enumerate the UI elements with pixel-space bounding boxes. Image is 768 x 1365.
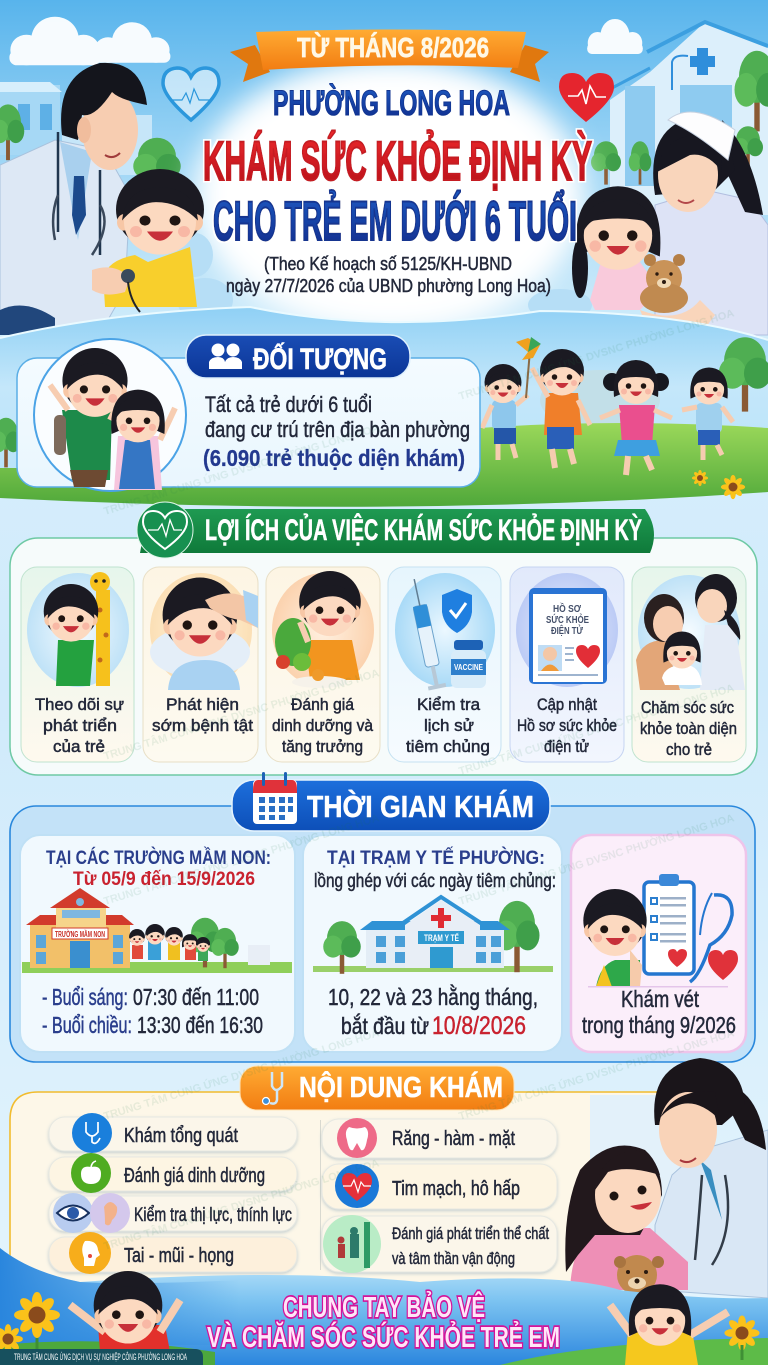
card: health station: TẠI TRẠM Y TẾ PHƯỜNG: <box>327 847 545 869</box>
building left <box>0 82 181 197</box>
target text: Tất cả trẻ dưới 6 tuổi <box>205 392 372 417</box>
card: health station: lồng ghép với các ngày tiêm chủng: <box>314 871 556 892</box>
header panel <box>0 0 768 345</box>
child running 2 <box>532 349 590 468</box>
clouds <box>9 17 643 65</box>
ribbon: TỪ THÁNG 8/2026 <box>297 32 489 63</box>
heading: exam time: THỜI GIAN KHÁM <box>307 788 534 824</box>
icon: calendar <box>253 772 297 824</box>
text panel <box>17 358 480 487</box>
watermarks: TRUNG TÂM CUNG ỨNG DVSNC PHƯỜNG LONG HOA <box>457 811 736 908</box>
target text <box>203 392 470 471</box>
card: complete care: Chăm sóc sức <box>641 698 734 717</box>
slogan <box>207 1290 560 1354</box>
child running 1 <box>482 364 528 460</box>
row: vision and hearing <box>49 1193 297 1233</box>
doctor with girl <box>565 1058 768 1298</box>
row: nutrition <box>49 1153 297 1193</box>
row: development: Đánh giá phát triển thể chất <box>392 1224 549 1243</box>
school illustration <box>22 888 292 973</box>
row: general exam <box>49 1113 297 1153</box>
watermarks: TRUNG TÂM CUNG ỨNG DVSNC PHƯỜNG LONG HOA <box>102 1156 381 1253</box>
child running 3 <box>600 360 672 475</box>
card: health record: điện tử <box>544 737 589 756</box>
watermarks: TRUNG TÂM CUNG ỨNG DVSNC PHƯỜNG LONG HOA <box>457 306 736 403</box>
waving girl <box>610 1284 728 1365</box>
hospital right <box>591 22 768 215</box>
card: kindergartens: TẠI CÁC TRƯỜNG MẦM NON: <box>46 847 271 869</box>
card: growth: phát triển <box>43 716 117 735</box>
footer banner <box>0 1248 768 1365</box>
card: health station: bắt đầu từ <box>341 1013 429 1039</box>
panel: exam content <box>10 1066 710 1295</box>
card: early detection: sớm bệnh tật <box>152 716 253 735</box>
card: vaccination: Kiểm tra <box>417 695 481 714</box>
card: vaccination <box>388 567 501 762</box>
subtitle: (Theo Kế hoạch số 5125/KH-UBND <box>264 254 512 274</box>
watermarks: TRUNG TÂM CUNG ỨNG DVSNC PHƯỜNG LONG HOA <box>457 681 736 778</box>
pinwheel <box>516 337 541 398</box>
heading: exam content: NỘI DUNG KHÁM <box>299 1070 503 1104</box>
icon: people <box>209 344 242 369</box>
clipboard <box>644 874 738 982</box>
waving boy <box>70 1271 180 1352</box>
card: health record <box>510 567 624 762</box>
card: nutrition: dinh dưỡng và <box>272 716 373 735</box>
card: nutrition: Đánh giá <box>291 695 354 714</box>
row: development <box>322 1215 557 1273</box>
organisation label: TRUNG TÂM CUNG ỨNG DỊCH VỤ SỰ NGHIỆP CÔNG PHƯỜNG LONG HOA <box>14 1352 187 1362</box>
heading: exam content <box>240 1066 514 1110</box>
card: nutrition <box>266 567 380 762</box>
card: kindergartens: 13:30 đến 16:30 <box>137 1012 263 1038</box>
card: growth <box>21 567 134 762</box>
watermarks <box>102 306 736 1253</box>
watermarks: TRUNG TÂM CUNG ỨNG DVSNC PHƯỜNG LONG HOA <box>457 1026 736 1123</box>
sunflowers <box>0 1292 760 1360</box>
row: dental <box>322 1118 557 1158</box>
card: health record: HỒ SƠ <box>553 602 581 615</box>
card: complete care <box>632 567 746 762</box>
icon: red heart <box>559 73 614 122</box>
teddy bear <box>614 1255 664 1295</box>
icon: stethoscope <box>262 1072 282 1104</box>
card: complete care: khỏe toàn diện <box>640 719 737 738</box>
row: ENT: Tai - mũi - họng <box>124 1245 234 1267</box>
watermarks: TRUNG TÂM CUNG ỨNG DVSNC PHƯỜNG LONG HOA <box>102 1026 381 1123</box>
row: nutrition: Đánh giá dinh dưỡng <box>124 1165 265 1187</box>
icon: outline heart <box>163 68 219 120</box>
row: dental: Răng - hàm - mặt <box>392 1128 515 1150</box>
child running 4 <box>682 368 733 460</box>
ribbon <box>230 30 549 82</box>
nurse and girl <box>572 112 768 335</box>
slogan: CHUNG TAY BẢO VỆ <box>283 1290 485 1324</box>
card: early detection: Phát hiện <box>166 695 239 714</box>
card: kindergartens: - Buổi sáng: <box>42 984 128 1010</box>
card: health station <box>303 835 562 1052</box>
target text: đang cư trú trên địa bàn phường <box>205 417 470 442</box>
panel: exam time <box>10 772 755 1062</box>
subtitle: ngày 27/7/2026 của UBND phường Long Hoa) <box>226 276 551 296</box>
doctor and boy <box>0 63 204 335</box>
pill heading: target group: ĐỐI TƯỢNG <box>253 342 387 376</box>
panel: benefits <box>10 502 757 775</box>
child <box>583 889 647 987</box>
card: health record: Hồ sơ sức khỏe <box>517 716 617 735</box>
station illustration: TRẠM Y TẾ <box>424 933 459 943</box>
watermarks: TRUNG TÂM CUNG ỨNG DVSNC PHƯỜNG LONG HOA <box>102 811 381 908</box>
card: kindergartens: Từ 05/9 đến 15/9/2026 <box>73 869 255 890</box>
row: vision and hearing: Kiểm tra thị lực, thính lực <box>134 1205 292 1226</box>
row: general exam: Khám tổng quát <box>124 1125 238 1147</box>
card: kindergartens <box>20 835 295 1052</box>
organisation label <box>0 1349 203 1365</box>
card: kindergartens: 07:30 đến 11:00 <box>133 984 259 1010</box>
card: vaccination: VACCINE <box>454 663 484 672</box>
row: development: và tâm thần vận động <box>392 1249 515 1268</box>
card: growth: của trẻ <box>53 737 105 756</box>
park scene <box>0 337 768 507</box>
card: catch-up exam: Khám vét <box>621 986 699 1012</box>
card: early detection <box>143 567 258 762</box>
title glow <box>195 57 585 333</box>
card: health record: Cập nhật <box>537 695 597 714</box>
circle illustration: children <box>34 339 186 491</box>
row: ENT <box>49 1232 297 1274</box>
card: vaccination: lịch sử <box>424 716 474 735</box>
heading: benefits <box>137 502 654 558</box>
card: catch-up exam <box>571 835 746 1052</box>
card: health station: 10, 22 và 23 hằng tháng, <box>328 984 538 1010</box>
row: cardio-respiratory <box>322 1164 557 1209</box>
title: ward name: PHƯỜNG LONG HOA <box>273 83 510 123</box>
card: health station: 10/8/2026 <box>432 1012 526 1040</box>
cloud tufts low sides <box>177 233 592 322</box>
watermarks: TRUNG TÂM CUNG ỨNG DVSNC PHƯỜNG LONG HOA <box>102 666 381 763</box>
card: complete care: cho trẻ <box>666 740 712 759</box>
card: kindergartens: - Buổi chiều: <box>42 1012 132 1038</box>
station illustration <box>313 897 553 974</box>
target text: (6.090 trẻ thuộc diện khám) <box>203 445 465 471</box>
row: cardio-respiratory: Tim mạch, hô hấp <box>392 1178 520 1200</box>
pill heading: target group <box>186 335 410 378</box>
panel: target group band <box>0 307 768 507</box>
watermarks: TRUNG TÂM CUNG ỨNG DVSNC PHƯỜNG LONG HOA <box>102 421 381 518</box>
card: growth: Theo dõi sự <box>35 695 124 714</box>
card: health record: SỨC KHỎE <box>546 613 589 626</box>
card: health record: ĐIỆN TỬ <box>551 624 584 637</box>
grass <box>0 1341 215 1365</box>
card: nutrition: tăng trưởng <box>282 737 363 756</box>
slogan: VÀ CHĂM SÓC SỨC KHỎE TRẺ EM <box>207 1320 560 1354</box>
subtitle <box>226 254 551 296</box>
card: vaccination: tiêm chủng <box>406 737 490 756</box>
heading: exam time <box>232 772 550 831</box>
school illustration: TRƯỜNG MẦM NON <box>55 929 105 939</box>
